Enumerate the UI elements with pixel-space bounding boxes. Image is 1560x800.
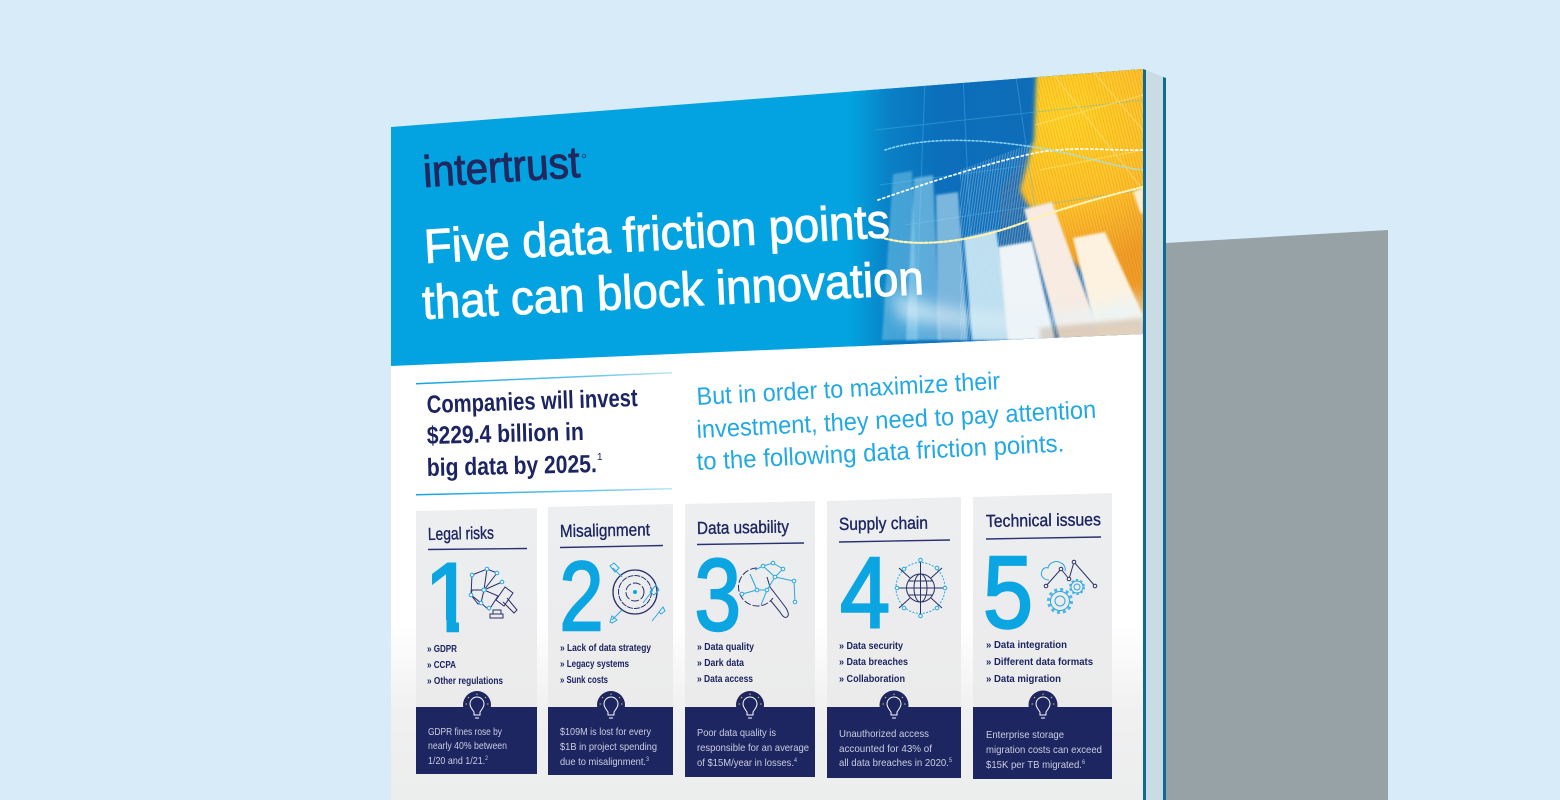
icon: light bulb [466, 694, 488, 718]
intro text: investment, they need to pay attention [696, 396, 1097, 444]
callout: data quality stat: 4 [794, 758, 798, 764]
callout: investment stat: big data by 2025. [427, 450, 597, 482]
icon: light bulb [882, 694, 906, 718]
callout: data quality stat: responsible for an average [697, 742, 809, 754]
icon: cloud, chart and gears [1041, 560, 1097, 612]
icon: globe network [895, 558, 947, 618]
bullet list: » Data access [697, 673, 753, 685]
bullet list: » Sunk costs [560, 674, 608, 686]
callout: misalignment stat: $109M is lost for every [560, 726, 652, 738]
bullet list: » Lack of data strategy [560, 642, 651, 654]
bullet list: » GDPR [427, 643, 457, 655]
icon: network and gavel [469, 567, 517, 618]
title [421, 195, 925, 330]
callout: GDPR stat: GDPR fines rose by [428, 726, 503, 738]
panel: misalignment [548, 504, 673, 775]
callout: unauthorized access stat [827, 690, 961, 778]
bullet list [986, 639, 1093, 685]
page [391, 69, 1143, 800]
callout: unauthorized access stat: Unauthorized access [839, 728, 929, 740]
header banner [391, 55, 1150, 366]
callout: investment stat: 1 [597, 452, 603, 463]
callout: investment stat [416, 372, 672, 496]
heading: technical issues: Technical issues [986, 509, 1101, 531]
callout: unauthorized access stat: accounted for 43% of [839, 743, 932, 755]
callout: migration cost stat: Enterprise storage [986, 729, 1064, 741]
callout: misalignment stat: due to misalignment. [560, 756, 657, 768]
callout: GDPR stat: 1/20 and 1/21. [428, 755, 495, 767]
number 2: 2 [560, 541, 604, 651]
number 3: 3 [694, 538, 741, 652]
bullet list: » Other regulations [427, 675, 503, 687]
bullet list: » Data integration [986, 639, 1067, 651]
callout: migration cost stat [973, 690, 1112, 779]
bullet list: » Legacy systems [560, 658, 629, 670]
heading: legal risks: Legal risks [428, 523, 494, 544]
callout: migration cost stat: migration costs can exceed [986, 744, 1102, 756]
number 1: 1 [424, 543, 474, 652]
logo: intertrust: intertrust [421, 138, 581, 197]
intro text [696, 367, 1097, 476]
callout: migration cost stat: 6 [1082, 760, 1086, 766]
bullet list: » Data migration [986, 673, 1061, 685]
bullet list: » Dark data [697, 657, 744, 669]
bullet list: » Data security [839, 640, 903, 652]
callout: data quality stat: Poor data quality is [697, 727, 776, 739]
callout: GDPR stat: nearly 40% between [428, 740, 507, 752]
panel: technical issues [973, 493, 1112, 779]
icon: light bulb [1032, 694, 1054, 718]
bullet list: » CCPA [427, 659, 456, 671]
bullet list: » Data breaches [839, 656, 908, 668]
panel: legal risks [416, 508, 537, 774]
heading: data usability: Data usability [697, 517, 789, 538]
bullet list: » Different data formats [986, 656, 1093, 668]
number 4: 4 [840, 537, 890, 649]
book shadow [1166, 230, 1388, 800]
bullet list: » Collaboration [839, 673, 905, 685]
icon: target and darts [610, 563, 665, 623]
callout: GDPR stat: 2 [485, 756, 489, 762]
title: that can block innovation [421, 252, 925, 330]
callout: misalignment stat: $1B in project spending [560, 741, 657, 753]
icon: light bulb [738, 694, 762, 718]
bullet list [560, 642, 651, 686]
callout: data quality stat: of $15M/year in losses. [697, 757, 805, 769]
bullet list [839, 640, 908, 685]
callout: unauthorized access stat: 5 [949, 758, 953, 764]
callout: misalignment stat: 3 [646, 757, 650, 763]
bullet list [697, 641, 754, 685]
callout: GDPR stat [416, 691, 537, 774]
heading: supply chain: Supply chain [839, 513, 928, 534]
panel: supply chain [827, 497, 961, 778]
title: Five data friction points [423, 195, 891, 274]
callout: misalignment stat [548, 691, 673, 775]
heading: misalignment: Misalignment [560, 519, 650, 541]
icon: light bulb [600, 694, 622, 718]
callout: unauthorized access stat: all data breaches in 2020. [839, 757, 959, 769]
callout: investment stat: Companies will invest [426, 384, 639, 419]
callout: investment stat: $229.4 billion in [426, 418, 584, 450]
header photo: data chart [850, 55, 1150, 350]
book spine [1143, 69, 1166, 800]
intro text: to the following data friction points. [696, 429, 1065, 476]
bullet list: » Data quality [697, 641, 754, 653]
callout: migration cost stat: $15K per TB migrated. [986, 759, 1091, 771]
number 5: 5 [983, 536, 1033, 650]
bullet list [427, 643, 503, 687]
panel: data usability [685, 501, 815, 777]
intro text: But in order to maximize their [696, 367, 1001, 411]
callout: data quality stat [685, 691, 815, 777]
icon: network and magnifier [739, 561, 797, 617]
